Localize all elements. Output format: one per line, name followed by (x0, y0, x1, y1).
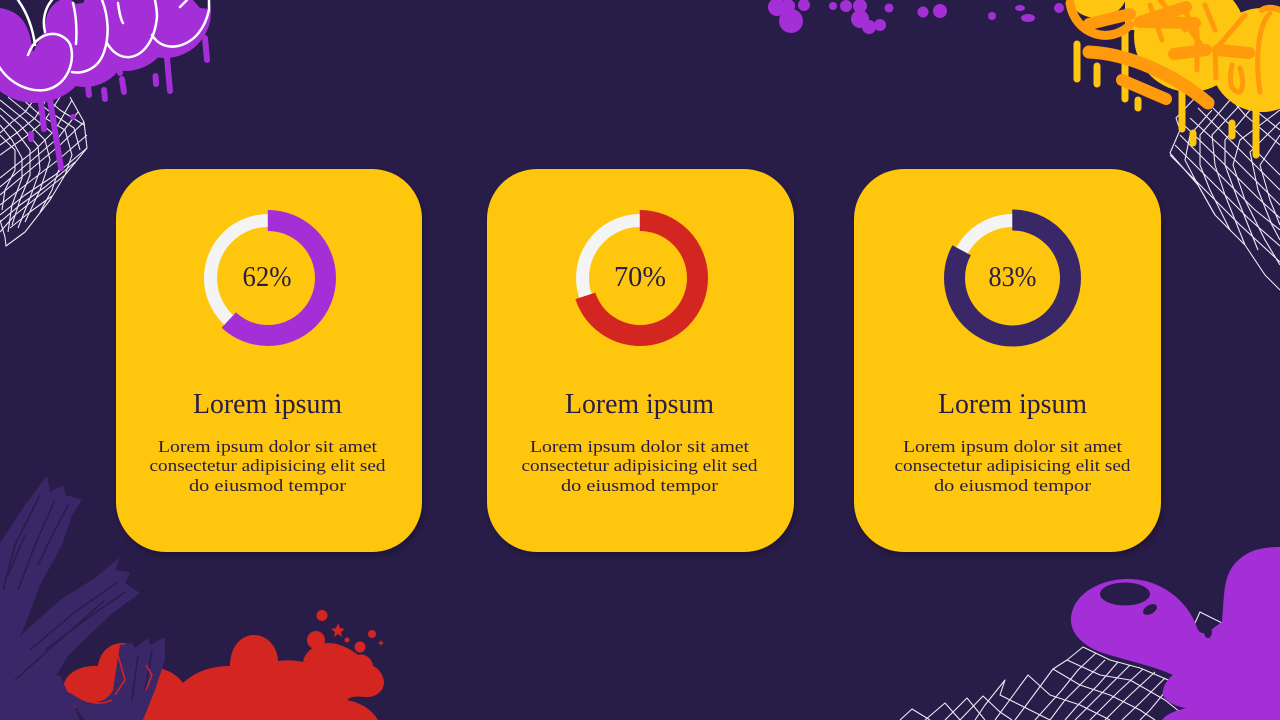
body text (522, 437, 758, 495)
body text: Lorem ipsum dolor sit amet (903, 437, 1122, 456)
paint splatter: top centre (768, 0, 1064, 34)
heading: Lorem ipsum (938, 389, 1087, 420)
body text (894, 437, 1131, 495)
donut chart: 83% (954, 220, 1070, 336)
body text: consectetur adipisicing elit sed (894, 456, 1131, 475)
net: bottom right (900, 612, 1222, 720)
paint blob: purple bottom right (1071, 547, 1280, 720)
body text: do eiusmod tempor (189, 476, 346, 495)
donut chart: 62% (210, 220, 326, 336)
net: top right (1170, 80, 1280, 290)
graffiti: purple top left (0, 0, 211, 168)
paint blob: red bottom left (63, 610, 384, 720)
body text: Lorem ipsum dolor sit amet (530, 437, 749, 456)
body text: do eiusmod tempor (934, 476, 1091, 495)
body text (150, 437, 386, 495)
donut chart: 70%: 70% (614, 261, 666, 293)
panel: card 2 (487, 169, 794, 552)
graffiti: yellow and orange top right (1067, 0, 1280, 155)
donut chart: 83%: 83% (988, 261, 1036, 293)
heading: Lorem ipsum (565, 389, 714, 420)
body text: Lorem ipsum dolor sit amet (158, 437, 377, 456)
brush strokes: navy bottom left (0, 476, 165, 720)
body text: consectetur adipisicing elit sed (522, 456, 758, 475)
heading: Lorem ipsum (193, 389, 342, 420)
panel: card 3 (854, 169, 1161, 552)
body text: do eiusmod tempor (561, 476, 718, 495)
body text: consectetur adipisicing elit sed (150, 456, 386, 475)
panel: card 1 (116, 169, 422, 552)
donut chart: 62%: 62% (242, 261, 292, 293)
donut chart: 70% (582, 220, 698, 336)
net: top left (0, 97, 87, 246)
